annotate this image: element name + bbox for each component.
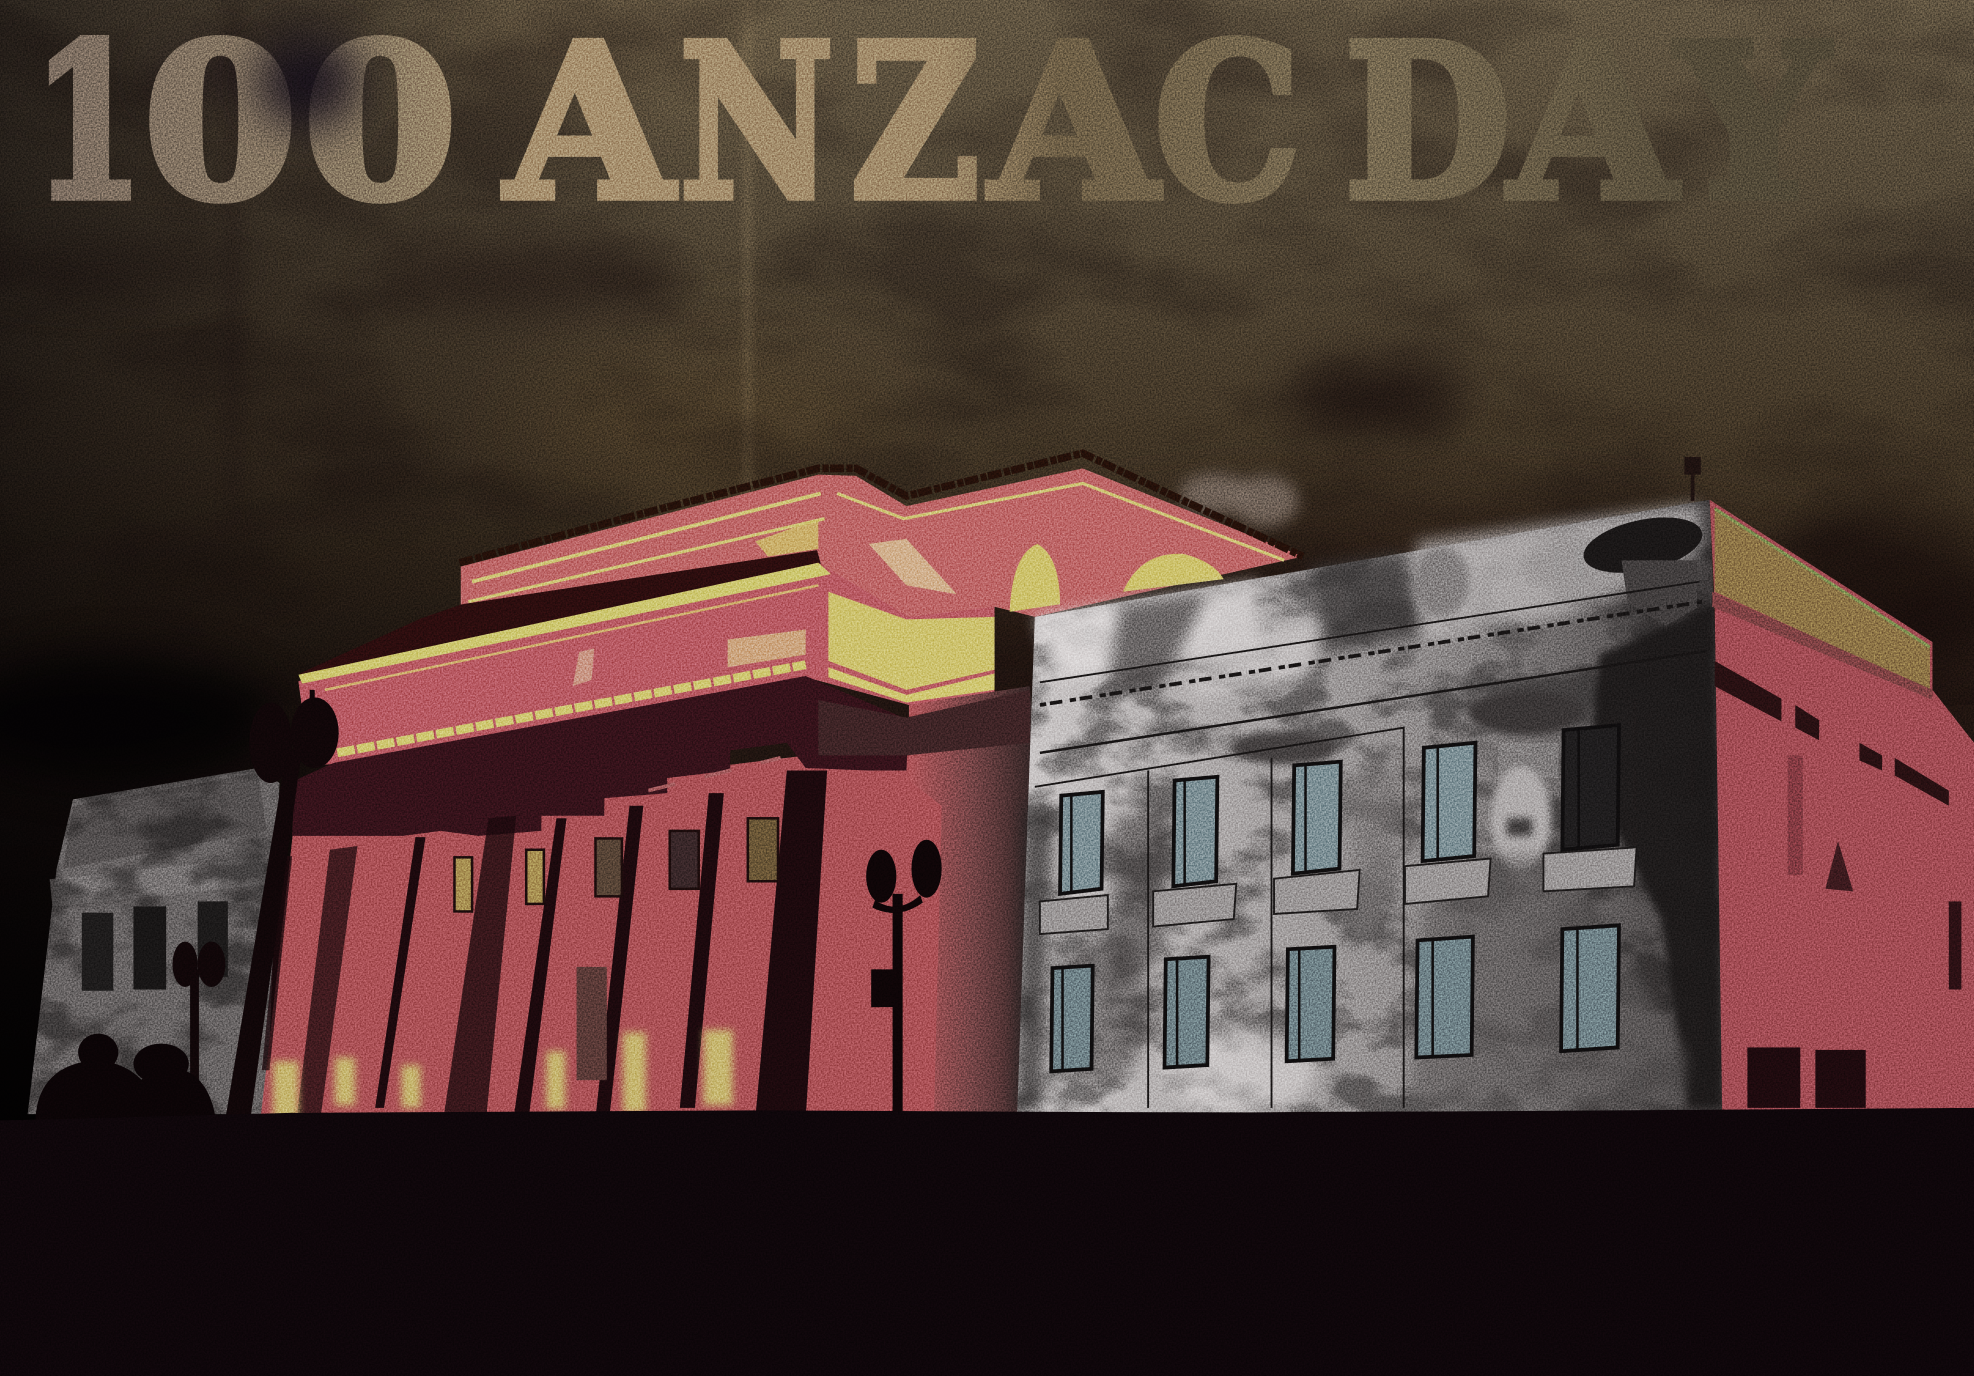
attic block with roofline [460, 453, 1303, 619]
window sills [1040, 847, 1637, 934]
dark foreground ground [0, 1108, 1974, 1376]
title: 100 ANZAC DAY: N [680, 0, 833, 246]
yellow bands [298, 563, 995, 753]
window mullions [1063, 729, 1579, 1070]
title: 100 ANZAC DAY: A [989, 0, 1160, 246]
columns [262, 770, 827, 1120]
title: 100 ANZAC DAY: A [504, 0, 675, 246]
people silhouettes [35, 1034, 217, 1123]
panel: grey left wing with projected texture [28, 768, 280, 1114]
title: 100 ANZAC DAY: 0 [144, 0, 297, 246]
projected soldiers [1007, 491, 1737, 1120]
title: 100 ANZAC DAY: A [1507, 0, 1679, 246]
title: 100 ANZAC DAY: 1 [33, 0, 144, 246]
dark cornice [292, 676, 1030, 836]
yellow light patches [273, 1030, 733, 1122]
panel: grey wall with projected soldiers portrait [1007, 491, 1737, 1120]
dark ink blot over the title [256, 34, 361, 130]
entablature [298, 563, 995, 765]
panel: right side pink wall [1684, 457, 1974, 1114]
panel: pink facade lit in red [259, 453, 1303, 1129]
lower wall [259, 743, 1035, 1129]
title: 100 ANZAC DAY: Y [1675, 0, 1830, 246]
dark roof band [300, 550, 821, 680]
windows [454, 818, 778, 1080]
title: 100 ANZAC DAY: 0 [303, 0, 457, 246]
icon: centre street lamp [866, 840, 942, 1127]
title: 100 ANZAC DAY: D [1345, 0, 1511, 246]
windows upper row [1060, 725, 1619, 894]
icon: small street lamp left [172, 942, 225, 1089]
cornice lines [1035, 582, 1707, 1108]
title: 100 ANZAC DAY: C [1154, 0, 1300, 246]
windows lower row [1051, 925, 1619, 1071]
title: 100 ANZAC DAY: Z [851, 0, 979, 246]
storm clouds [0, 0, 1974, 781]
icon: tall street lamp left [224, 690, 339, 1127]
corner pier [909, 686, 1035, 1114]
